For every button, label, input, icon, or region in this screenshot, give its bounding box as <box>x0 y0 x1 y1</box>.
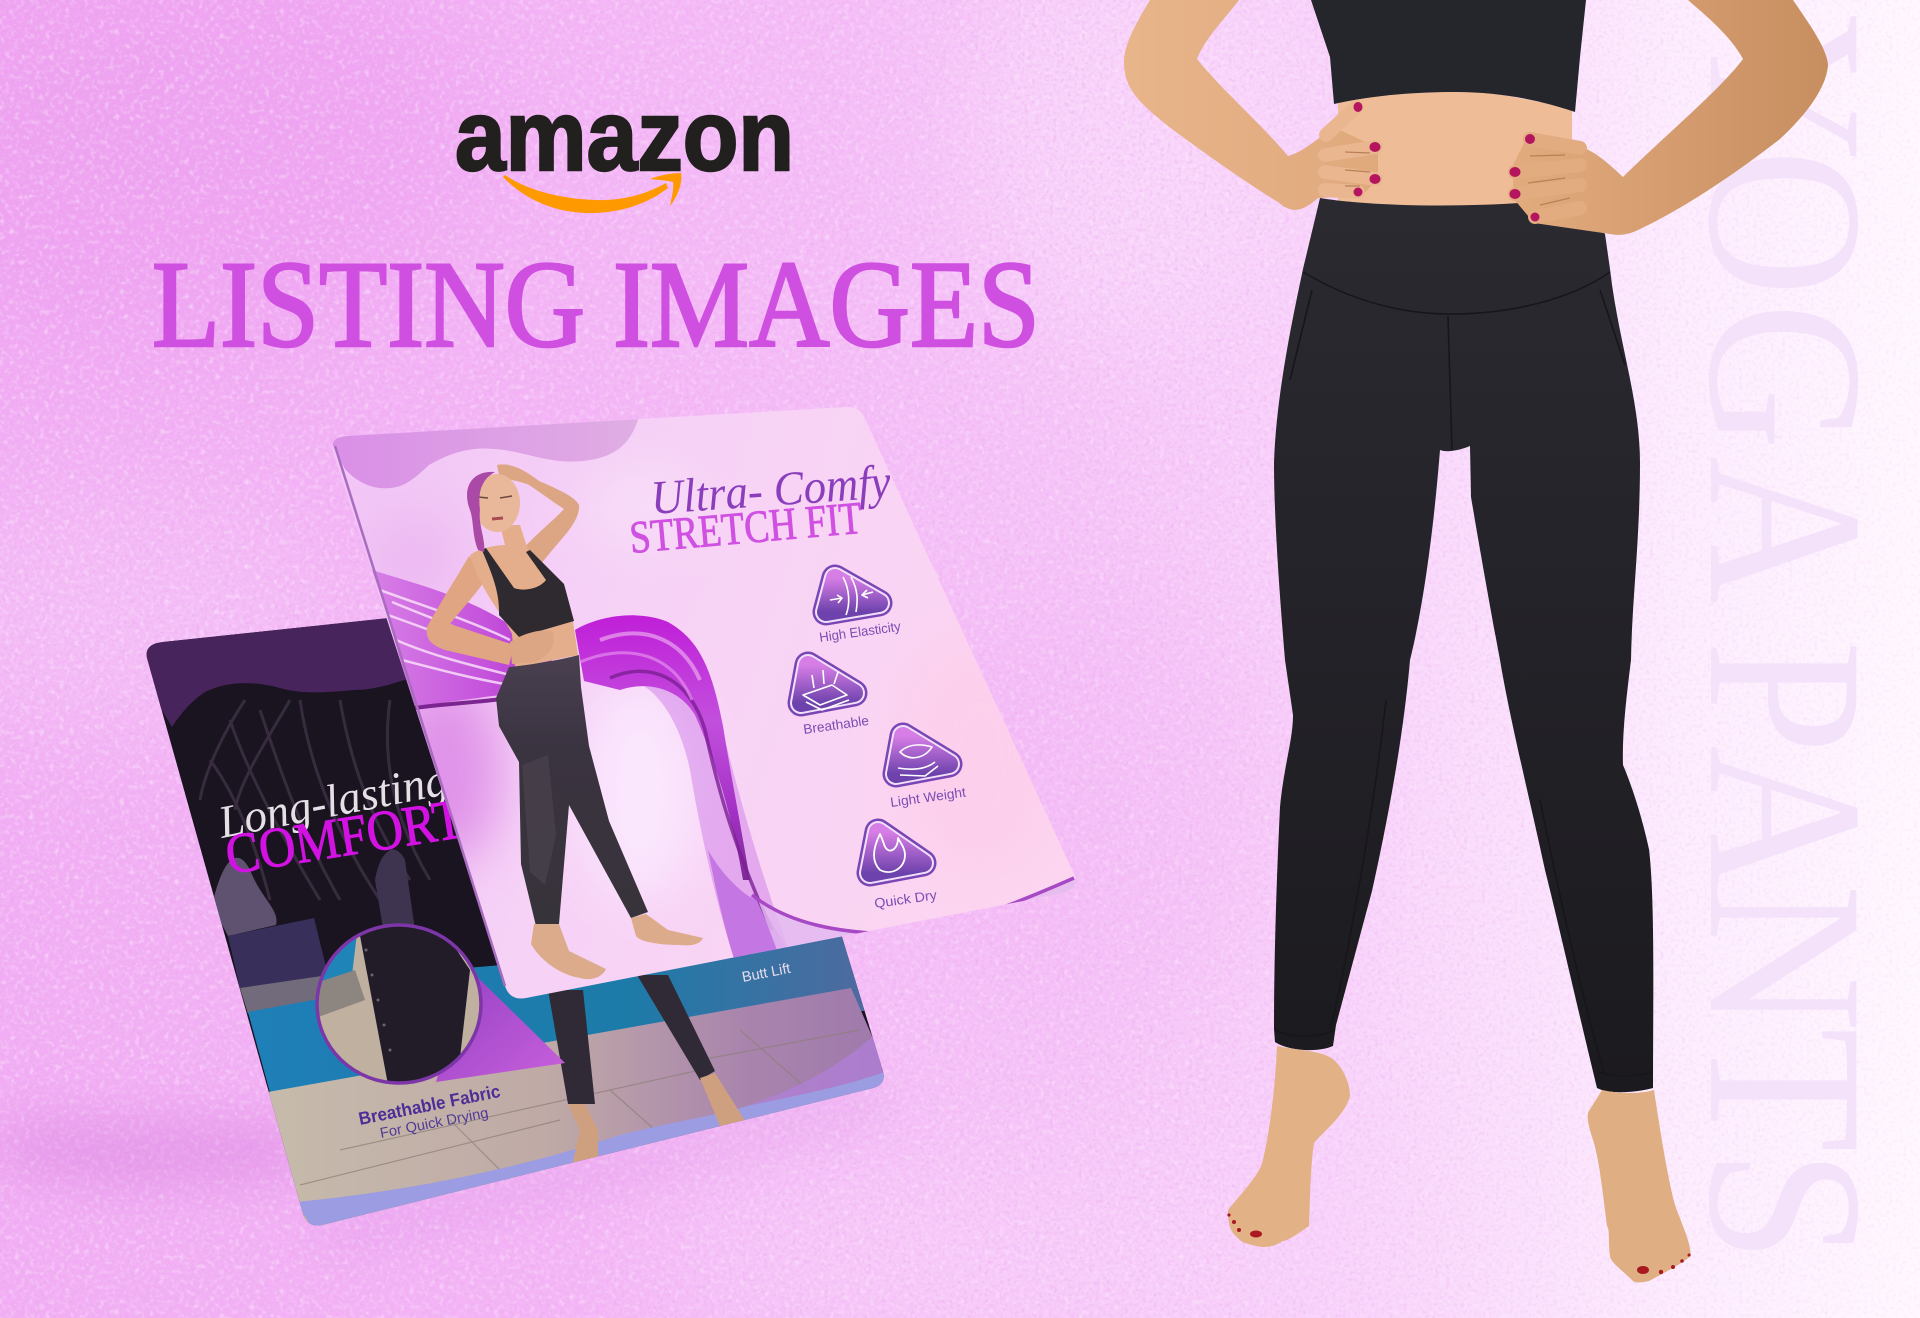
left arm <box>427 556 514 665</box>
icon: feather over hand <box>896 736 949 776</box>
zoom callout triangle <box>436 970 565 1082</box>
caption: Butt Lift: Butt Lift <box>741 961 792 986</box>
dark garden photo <box>146 618 884 1226</box>
label: Quick Dry <box>873 887 938 911</box>
label: Light Weight <box>889 785 967 810</box>
hero model in black leggings <box>1124 0 1828 1282</box>
ribbon bottom swoosh <box>752 878 1085 958</box>
leggings <box>496 655 648 926</box>
right foot <box>1588 1090 1691 1282</box>
icon: layers with rising arrows <box>801 665 854 710</box>
caption: For Quick Drying: For Quick Drying <box>379 1105 490 1142</box>
stone deck <box>268 988 900 1240</box>
pool <box>248 935 870 1100</box>
icon: arrows compressing fabric <box>826 577 879 615</box>
amazon logo <box>455 80 794 213</box>
toenail polish <box>1227 1213 1690 1274</box>
left foot <box>1228 1046 1350 1247</box>
feature: Quick Dry <box>870 832 938 911</box>
caption: Breathable Fabric: Breathable Fabric <box>357 1081 502 1129</box>
icon: droplet with flame <box>870 832 923 873</box>
feet <box>531 924 606 979</box>
panel: front listing card "Ultra-Comfy Stretch Fit" <box>320 400 1090 1010</box>
feature: Light Weight <box>889 736 967 810</box>
nail polish <box>1354 102 1380 196</box>
top-left wave shape <box>325 410 640 488</box>
raised arm <box>497 464 579 565</box>
card paper <box>320 400 1090 1010</box>
head and face <box>474 474 520 532</box>
feature: High Elasticity <box>818 577 902 645</box>
hand on hip <box>510 630 554 664</box>
title: LISTING IMAGES: LISTING IMAGES <box>152 236 1040 373</box>
drop shadow under cards <box>0 1095 900 1245</box>
sports bra <box>1311 0 1586 112</box>
vertical watermark: YOGA PANTS: YOGA PANTS <box>1662 14 1908 1263</box>
legging seams <box>1275 272 1652 1076</box>
photo model legs <box>548 975 747 1166</box>
hair and ponytail <box>467 472 495 552</box>
zoom callout circle <box>315 923 483 1085</box>
statue silhouettes <box>212 858 277 936</box>
purple ribbon, arch <box>575 615 772 930</box>
feature: Breathable <box>801 665 870 737</box>
neck, chest and midriff <box>470 525 578 668</box>
garden wall <box>228 918 328 988</box>
lavender bottom strip <box>300 1072 884 1226</box>
heading: Long-lasting: Long-lasting <box>213 753 452 848</box>
card product model <box>427 464 703 979</box>
purple ribbon, left part <box>372 570 560 708</box>
high waist leggings <box>1274 198 1653 1092</box>
amazon smile arrow <box>503 173 681 213</box>
label: Breathable <box>802 713 870 737</box>
bare midriff <box>1338 86 1572 215</box>
label: High Elasticity <box>818 619 902 645</box>
mesh panel <box>522 755 556 885</box>
heading: COMFORT: COMFORT <box>221 787 468 887</box>
right arm and hand <box>1510 0 1828 235</box>
top purple wave band <box>146 618 406 727</box>
sheer ribbon veil <box>600 664 790 962</box>
amazon wordmark: amazon <box>455 80 794 192</box>
heading: Ultra-Comfy: Ultra- Comfy <box>649 455 893 525</box>
heading: STRETCH FIT: STRETCH FIT <box>627 492 864 563</box>
left arm and hand <box>1124 0 1380 210</box>
card edge thickness <box>335 446 505 986</box>
sports bra <box>482 548 574 637</box>
panel: back listing card "Long-lasting Comfort" <box>146 618 884 1226</box>
